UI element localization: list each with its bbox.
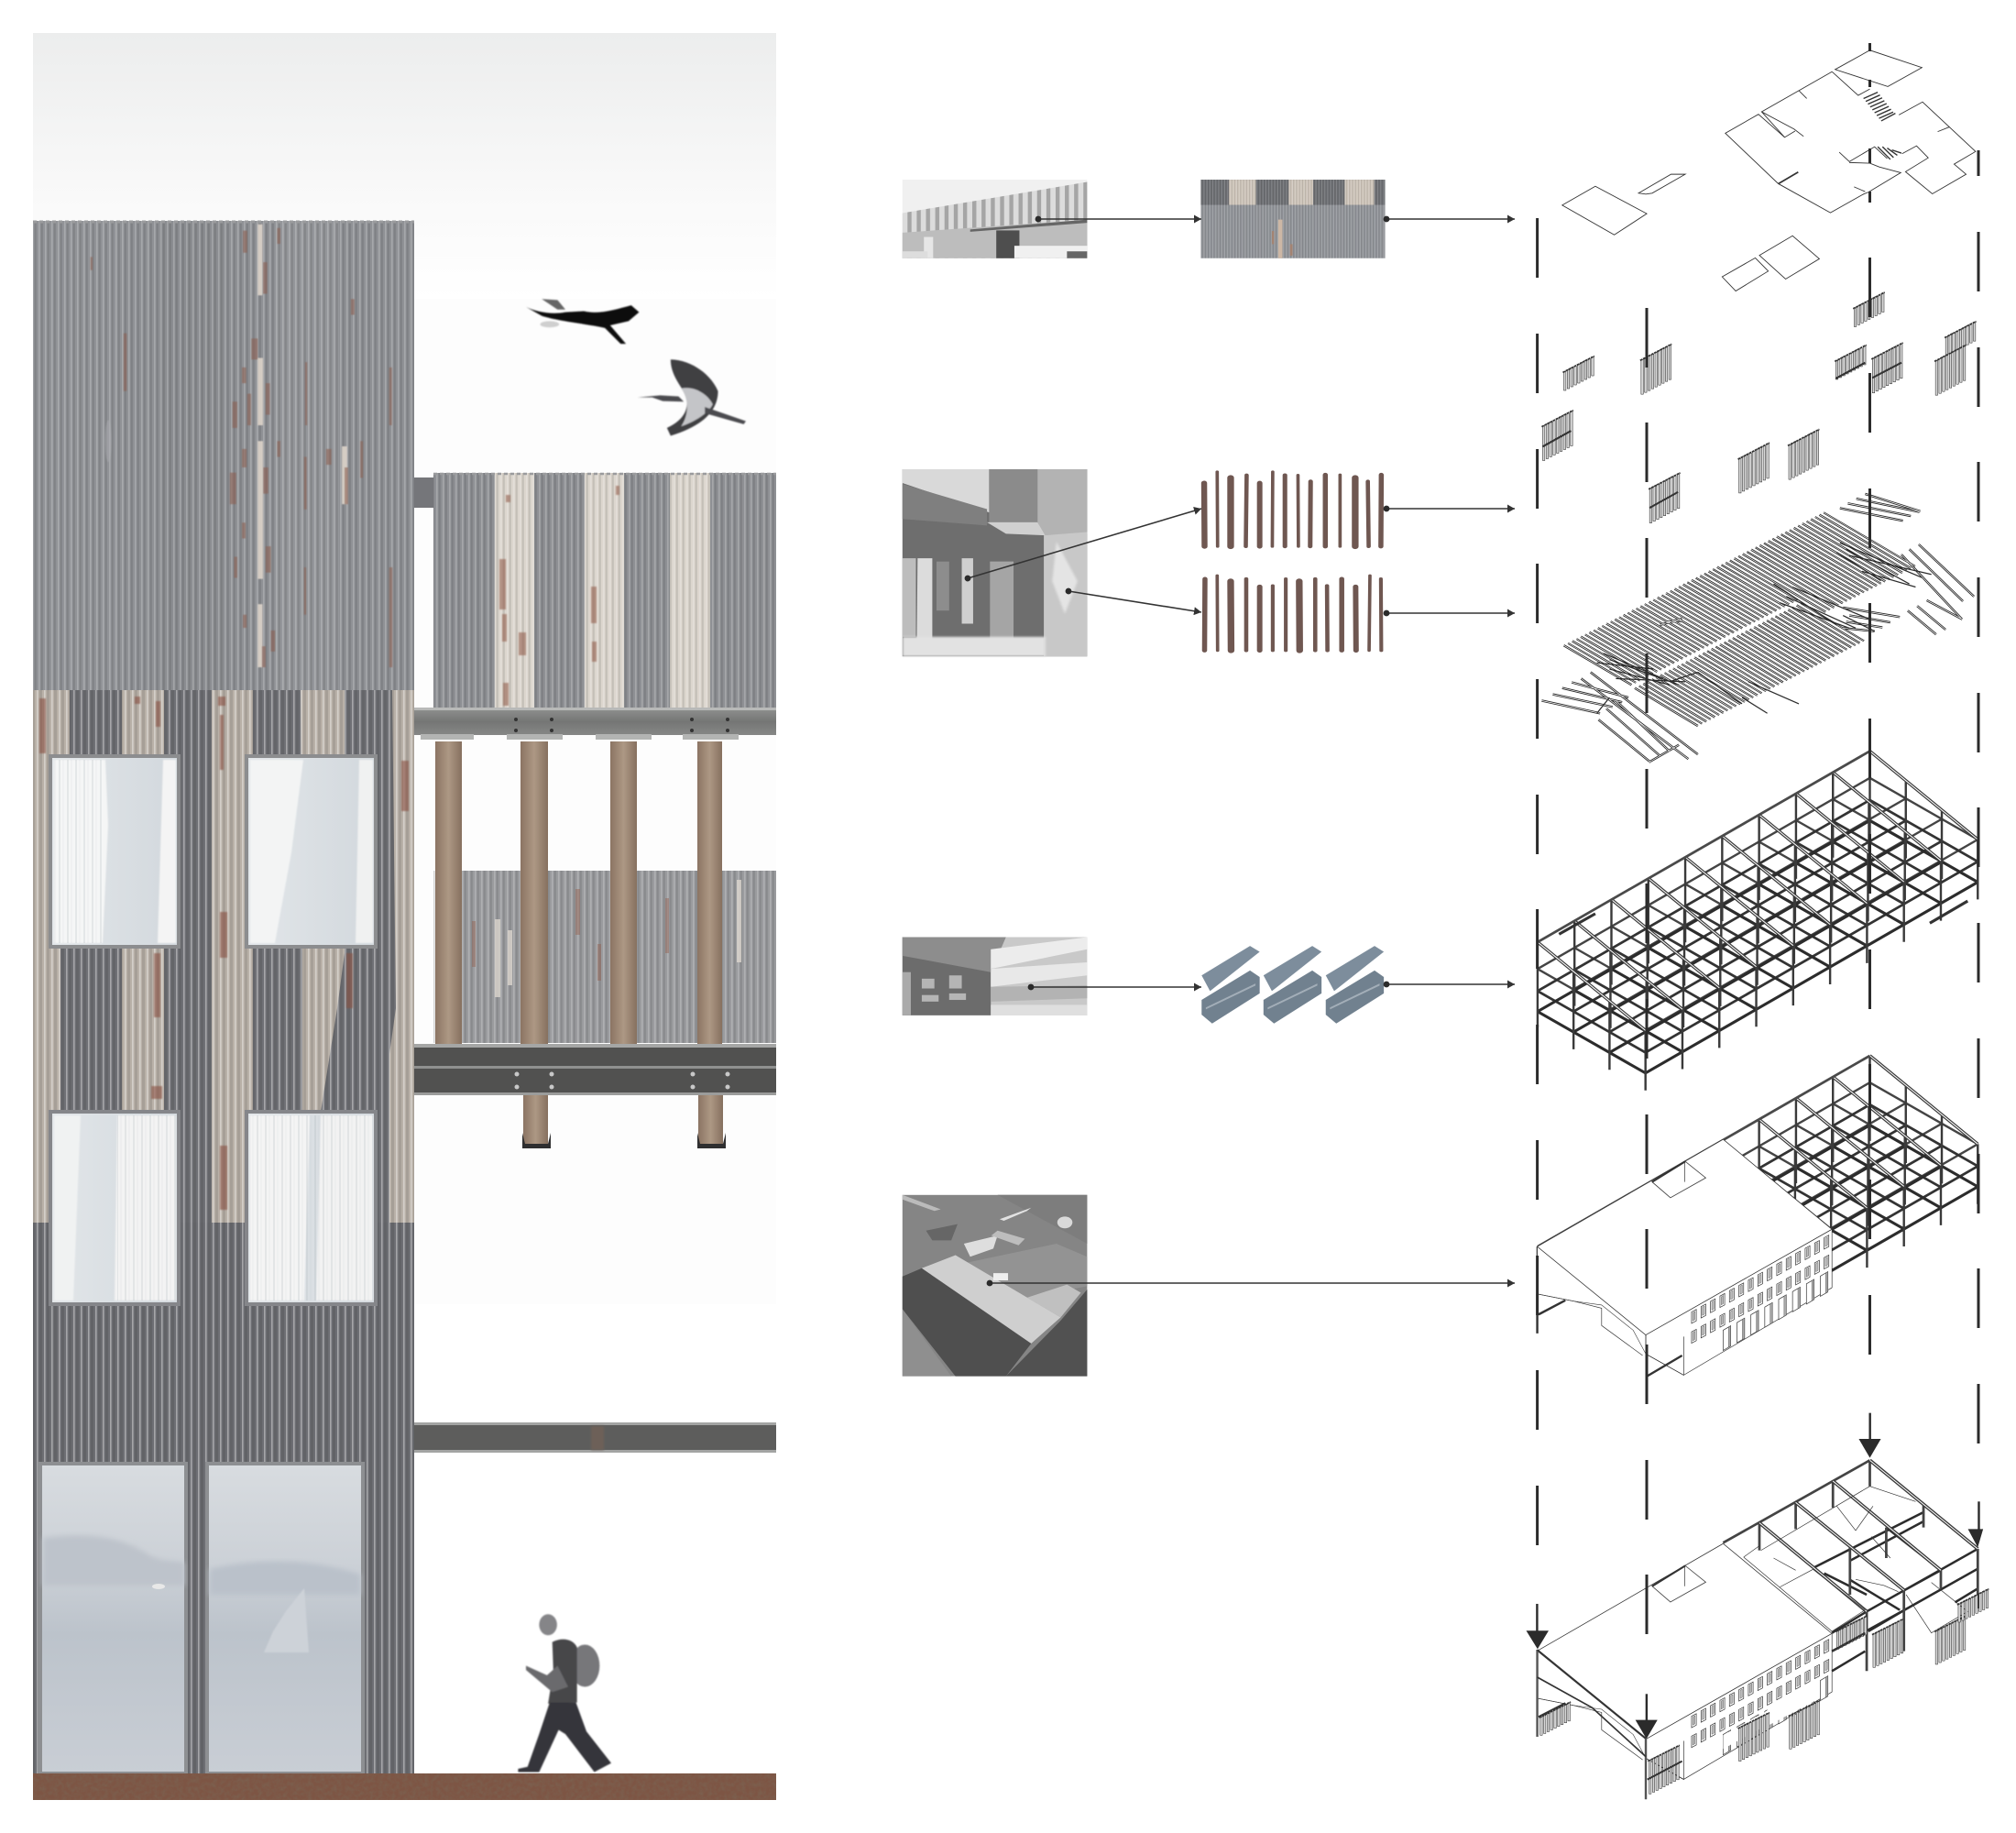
roof and facade [1538, 1543, 1832, 1807]
lower steel beam [414, 1044, 776, 1095]
axonometric layer: timber cladding piles [1541, 292, 1977, 523]
arrow: sheet to roof layer [1386, 218, 1515, 220]
ground strip [33, 1773, 776, 1800]
arrow: right corner load [1968, 1501, 1983, 1547]
arrow: front corner load [1636, 1694, 1658, 1739]
window: upper right [247, 756, 376, 947]
axonometric layer: assembled building [1538, 1460, 1989, 1807]
window: upper left [50, 756, 179, 947]
dashed explosion guide lines [1538, 43, 1978, 1634]
arrow: beams to steel frame [1386, 983, 1515, 985]
tower upper cladding [33, 221, 414, 690]
material: timber piles row two [1205, 576, 1381, 651]
material: steel I-beams [1201, 946, 1384, 1024]
partial frame, slabs and piles [1538, 1460, 1989, 1799]
panel: facade elevation [33, 33, 776, 1800]
rust and peeling paint [91, 225, 392, 667]
glazed door left [40, 1464, 186, 1773]
arrow: pier photo to piles row two [1068, 591, 1201, 612]
tower lower cladding [33, 1223, 414, 1773]
ground-floor steel beam [414, 1422, 776, 1453]
arrow: piles row one to cladding layer [1386, 508, 1515, 510]
arrow: aerial photo to existing shell [990, 1282, 1515, 1284]
upper steel beam [414, 708, 776, 740]
photo: stacked steel sections [903, 937, 1087, 1015]
material: timber piles row one [1204, 472, 1381, 546]
tower middle striped cladding [33, 690, 414, 1223]
axonometric layer: roof timber rafters [1541, 494, 1974, 763]
photo: aerial view of existing warehouse [903, 1195, 1087, 1377]
timber poles [435, 741, 726, 1148]
arrow: wall photo to sheet [1038, 218, 1201, 220]
arrow: steel photo to beams [1031, 986, 1201, 988]
connector stub [414, 477, 433, 508]
material swatch: reclaimed corrugated sheet [1200, 180, 1385, 258]
photo: corrugated warehouse wall [903, 180, 1087, 258]
annex upper cladding [433, 473, 776, 708]
arrow: rear corner load [1858, 1413, 1881, 1458]
window: lower left [50, 1112, 179, 1304]
axonometric layer: floor plates [1562, 50, 1976, 291]
axonometric layer: steel frame [1538, 752, 1978, 1091]
axonometric layer: existing shell over steel frame [1538, 1056, 1978, 1403]
glazed door right with sailboat reflection [207, 1464, 363, 1773]
window: lower right [247, 1112, 376, 1304]
bird: dark diving [526, 299, 639, 344]
annex lower cladding [433, 871, 776, 1043]
sky backdrop [33, 33, 776, 299]
arrow: left corner load [1527, 1604, 1549, 1649]
bird: grey heron [638, 359, 746, 436]
rust streaks on pale paint [39, 697, 409, 1210]
person walking [518, 1614, 611, 1772]
arrow: piles row two to timber layer [1386, 612, 1515, 614]
arrow: pier photo to piles row one [968, 509, 1201, 578]
photo: concrete pier columns [903, 469, 1087, 656]
